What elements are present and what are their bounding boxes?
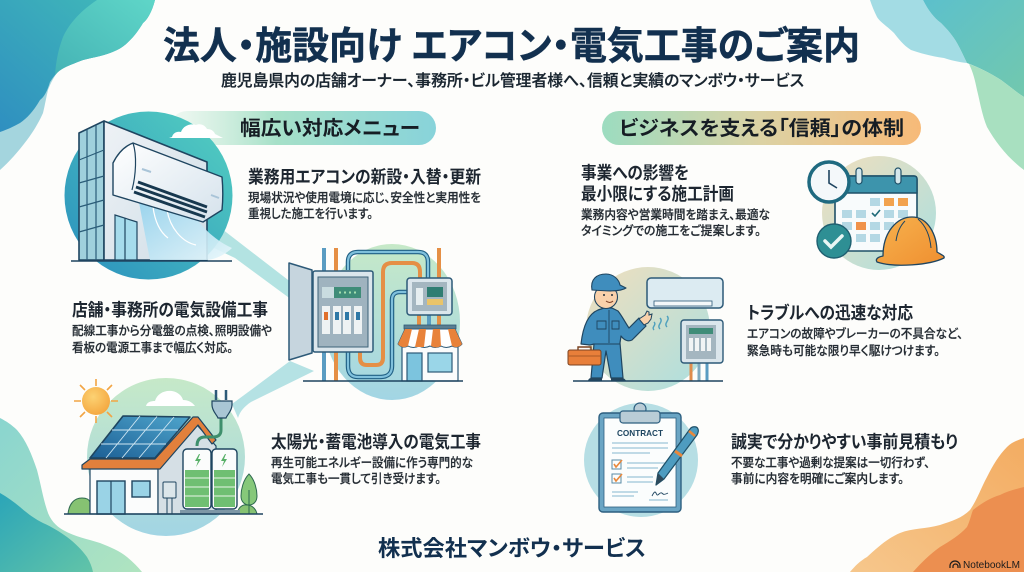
icon: sun (74, 379, 118, 423)
illustration: technician with air conditioner (568, 267, 723, 391)
icon: check badge (817, 224, 851, 258)
text block: rapid response (747, 303, 963, 358)
text block: shop and office electrical work: 配線工事から分電盤の点検、照明設備や (72, 323, 272, 338)
text block: construction planning: タイミングでの施工をご提案します。 (580, 223, 761, 238)
text block: honest estimates: 誠実で分かりやすい事前見積もり (731, 432, 958, 452)
text block: honest estimates: 事前に内容を明確にご案内します。 (731, 471, 904, 486)
text block: construction planning: 事業への影響を (581, 163, 689, 183)
decorative blob: bottom right (850, 438, 1024, 572)
icon: hard hat (876, 217, 944, 265)
title: 法人・施設向け エアコン・電気工事のご案内 (163, 26, 860, 68)
section pill: wide-ranging menu (170, 111, 436, 145)
text block: construction planning: 最小限にする施工計画 (581, 184, 734, 204)
section pill: trust system (602, 111, 921, 145)
text block: honest estimates: 不要な工事や過剰な提案は一切行わず、 (731, 455, 930, 470)
icon: toolbox (568, 347, 601, 365)
footer company name: 株式会社マンボウ・サービス (378, 536, 646, 561)
text block: construction planning: 業務内容や営業時間を踏まえ、最適な (581, 207, 770, 222)
text block: shop and office electrical work: 看板の電源工事まで幅広く対応。 (72, 340, 233, 355)
text block: solar and battery electrical work: 電気工事も一貫して引き受けます。 (271, 471, 441, 486)
illustration: building with air conditioner (64, 112, 232, 280)
decorative blob: top left (0, 0, 155, 170)
text block: rapid response: 緊急時も可能な限り早く駆けつけます。 (747, 343, 940, 358)
text block: rapid response: トラブルへの迅速な対応 (747, 303, 913, 323)
text block: commercial air conditioning (248, 167, 481, 221)
connector bands between service illustrations (214, 229, 314, 418)
icon: pen (656, 427, 698, 485)
text block: commercial air conditioning: 重視した施工を行います。 (248, 206, 373, 221)
text block: shop and office electrical work (72, 300, 272, 355)
illustration: solar house and storage batteries (64, 378, 263, 536)
text block: rapid response: エアコンの故障やブレーカーの不具合など、 (747, 326, 963, 341)
illustration: contract clipboard and pen (584, 403, 698, 517)
decorative blob: top right (870, 0, 1024, 170)
section pill: trust system: ビジネスを支える「信頼」の体制 (619, 117, 904, 140)
text block: commercial air conditioning: 現場状況や使用電境に応じ、安全性と実用性を (248, 190, 481, 205)
illustration: contract clipboard and pen: CONTRACT (617, 428, 664, 438)
text block: solar and battery electrical work (271, 432, 481, 486)
text block: solar and battery electrical work: 再生可能エネルギー設備に作う専門的な (271, 455, 473, 470)
text block: construction planning (580, 163, 770, 238)
NotebookLM watermark: NotebookLM (963, 559, 1020, 571)
decorative blob: bottom left (0, 418, 142, 572)
subtitle: 鹿児島県内の店舗オーナー、事務所・ビル管理者様へ、信頼と実績のマンボウ・サービス (221, 72, 804, 90)
figure: technician (581, 274, 652, 381)
text block: shop and office electrical work: 店舗・事務所の電気設備工事 (72, 300, 268, 320)
section pill: wide-ranging menu: 幅広い対応メニュー (240, 117, 420, 140)
icon: clock (809, 162, 849, 202)
illustration: electrical panel and shop (289, 244, 463, 400)
illustration: calendar, clock and helmet (809, 156, 944, 270)
text block: commercial air conditioning: 業務用エアコンの新設・入替・更新 (248, 167, 481, 187)
text block: honest estimates (731, 432, 958, 486)
text block: solar and battery electrical work: 太陽光・蓄電池導入の電気工事 (271, 432, 481, 452)
